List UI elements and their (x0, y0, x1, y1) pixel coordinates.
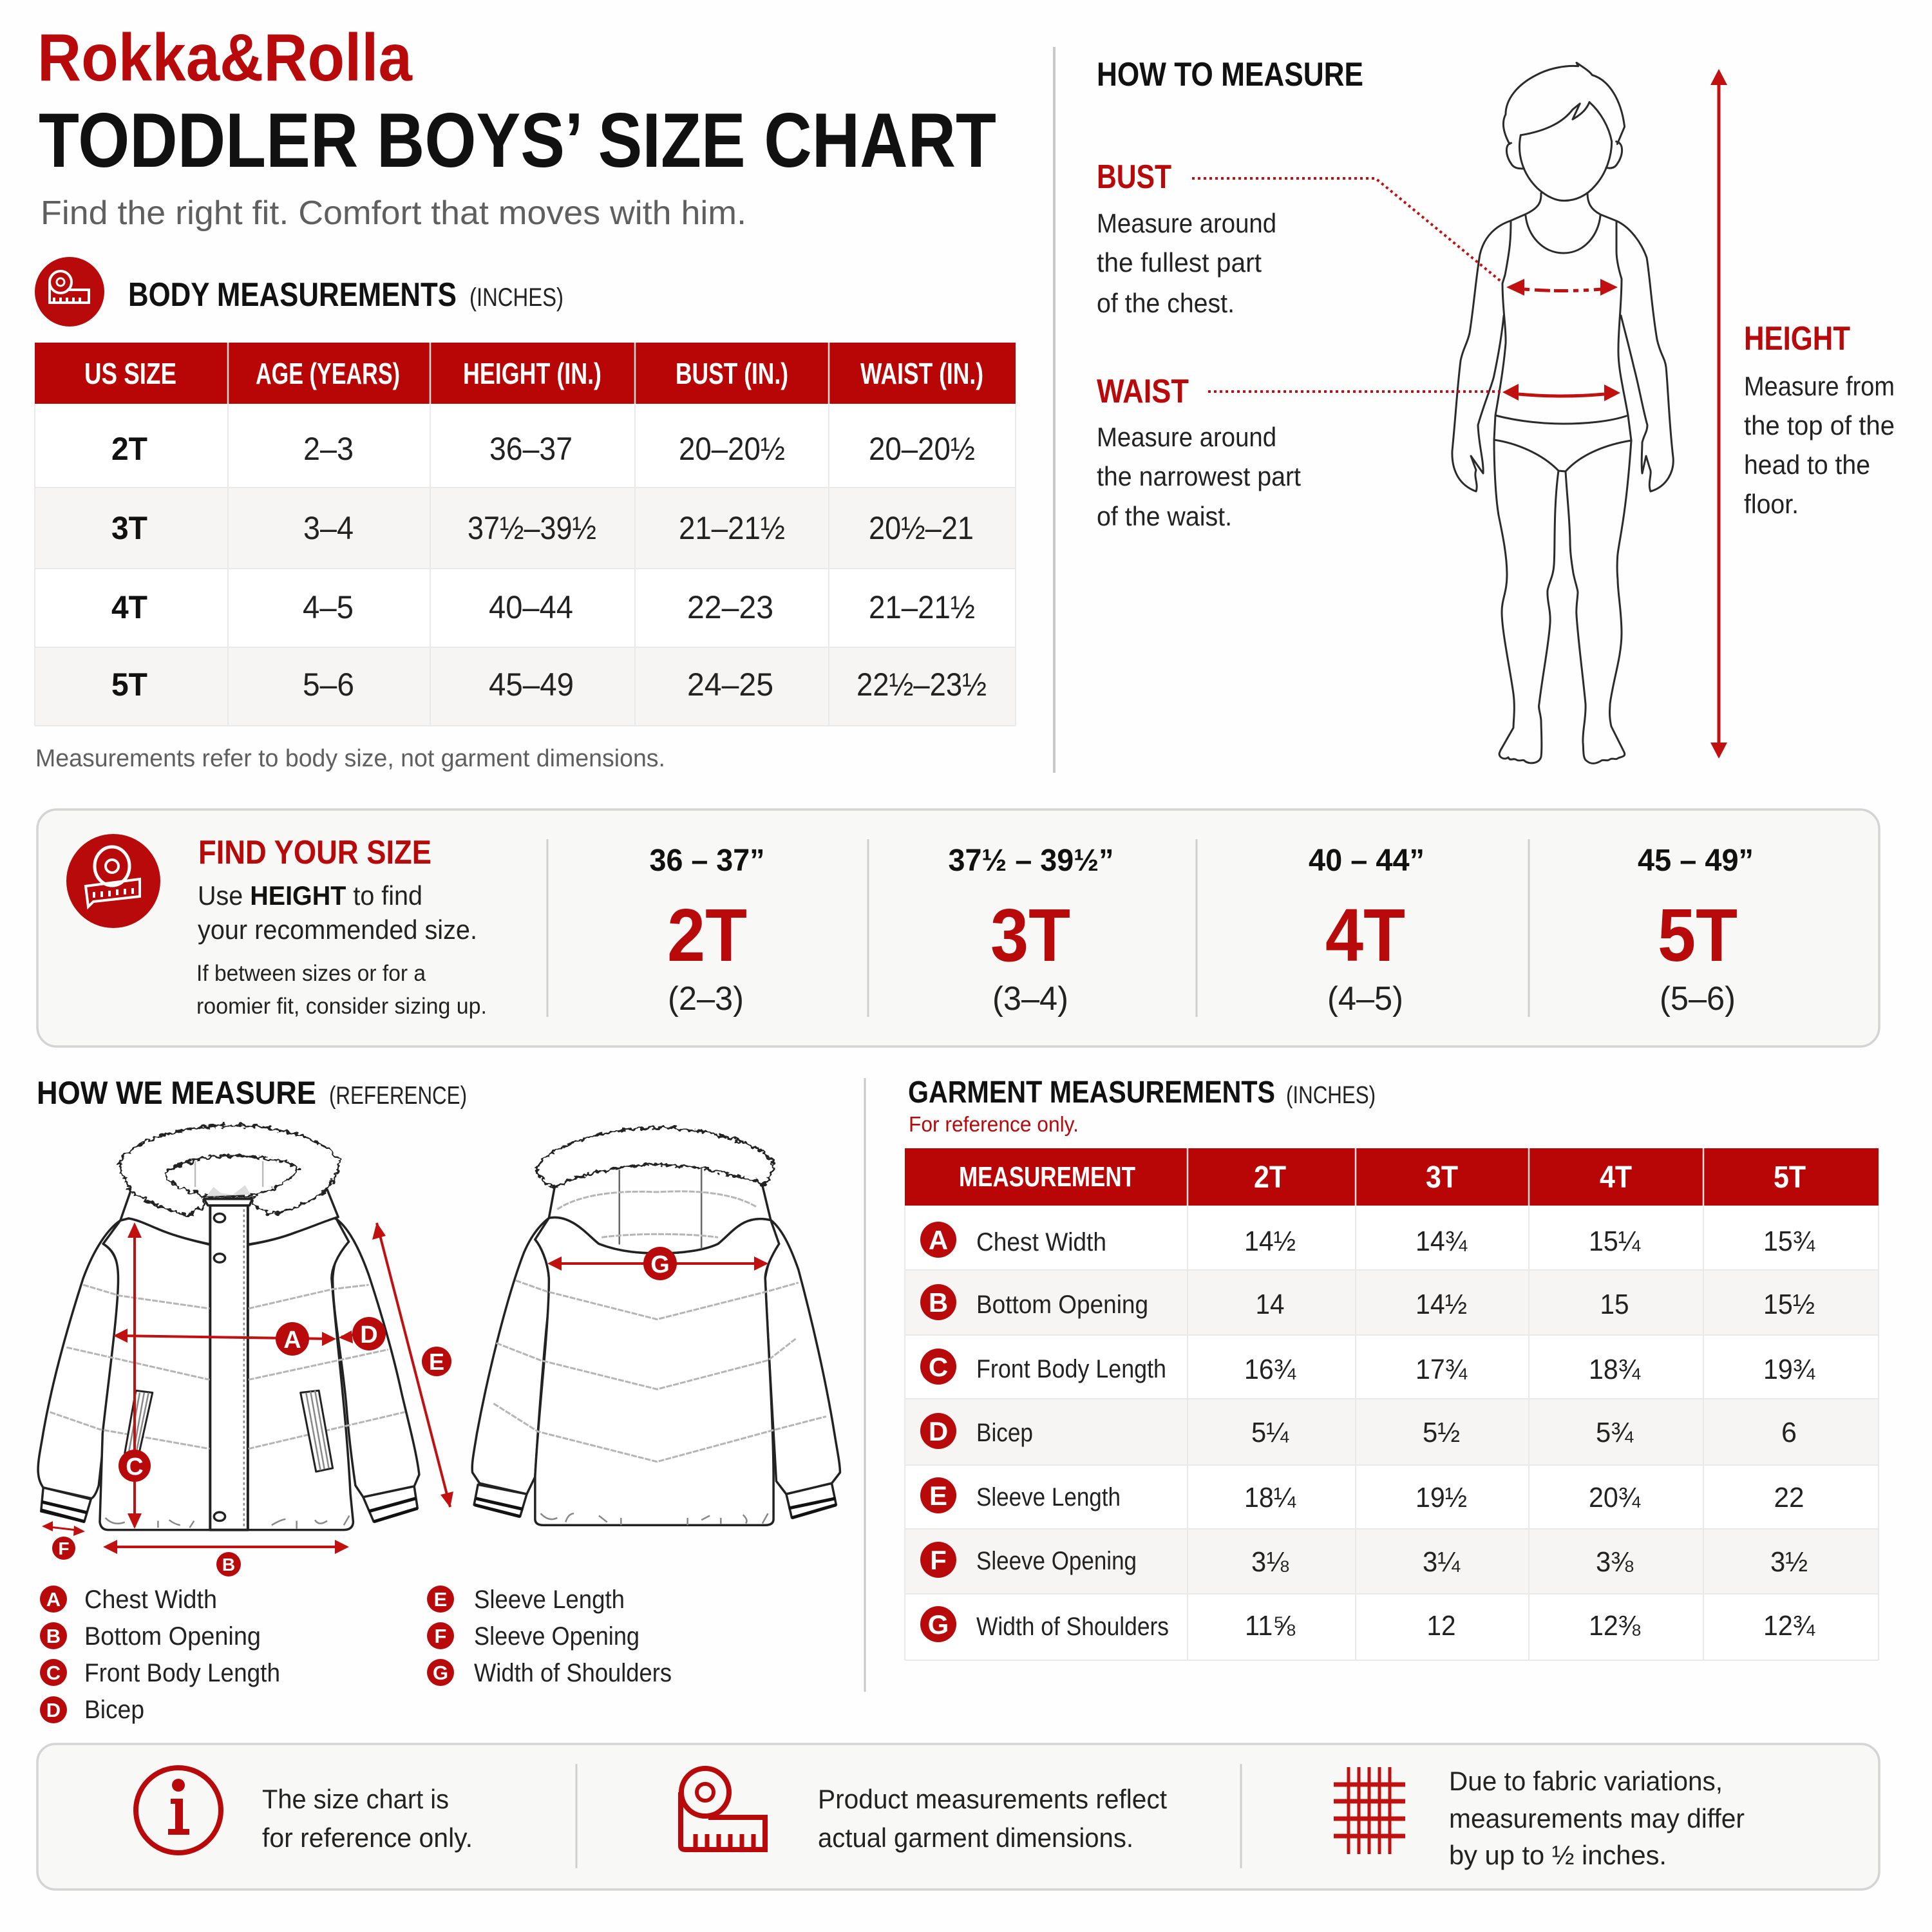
legend: measurement keys (40, 1586, 672, 1724)
size column: 4T: 40 – 44” (1309, 844, 1425, 878)
instructions text: roomier fit, consider sizing up. (196, 994, 487, 1019)
note: product measurements (818, 1784, 1167, 1853)
badge: A (276, 1322, 309, 1356)
figure: child outline (1452, 62, 1673, 764)
panel: footer notes (37, 1744, 1879, 1889)
table row: sleeve opening: 3⅜ (1596, 1546, 1633, 1578)
note: fabric variation (1449, 1766, 1745, 1870)
table row: 2T: 20–20½ (679, 431, 785, 467)
note: product measurements: actual garment dimensions. (818, 1823, 1133, 1853)
table row: width of shoulders: G (928, 1609, 949, 1640)
table row: sleeve opening: F (930, 1545, 947, 1575)
table row: 2T: 36–37 (489, 431, 573, 467)
bust explanation (1097, 158, 1276, 318)
legend item B: Bottom Opening (84, 1622, 261, 1651)
table row: 5T: 22½–23½ (857, 667, 987, 703)
legend item C: Front Body Length (84, 1659, 280, 1687)
size column: 3T: (3–4) (992, 980, 1068, 1018)
table row: sleeve length: E (929, 1481, 947, 1511)
table row: sleeve length: Sleeve Length (976, 1483, 1121, 1511)
instructions text: If between sizes or for a (196, 961, 426, 986)
table row: bottom opening (920, 1284, 1815, 1320)
height explanation (1744, 320, 1895, 519)
table header row: HEIGHT (IN.) (463, 357, 601, 390)
arrow: B bottom opening (103, 1540, 349, 1554)
arrow: D bicep (339, 1331, 355, 1343)
table row: 4T: 40–44 (489, 589, 573, 625)
table row: front body length (920, 1349, 1815, 1385)
table row: front body length: 19¾ (1763, 1354, 1815, 1385)
icon: measuring tape badge (35, 257, 104, 327)
reference note: For reference only. (909, 1112, 1079, 1136)
legend item G: Width of Shoulders (474, 1659, 672, 1687)
instructions text: FIND YOUR SIZE (198, 834, 431, 871)
table row: 3T (111, 510, 974, 546)
table row: 3T: 3–4 (303, 510, 354, 546)
size column: 2T: (2–3) (668, 980, 744, 1018)
size column: 5T (1638, 844, 1754, 1018)
table row: chest width: 14½ (1244, 1226, 1296, 1257)
table row: sleeve opening (920, 1542, 1808, 1578)
arrow: height (1710, 69, 1727, 759)
table row: bottom opening: Bottom Opening (976, 1291, 1148, 1319)
badge: F (52, 1537, 75, 1560)
legend item A: A (46, 1588, 61, 1611)
size column: 5T: 45 – 49” (1638, 844, 1754, 878)
table row: sleeve length: 20¾ (1589, 1482, 1641, 1513)
waist explanation (1097, 373, 1301, 531)
arrow: bust measure (1506, 279, 1618, 296)
table row: 3T: 20½–21 (869, 510, 974, 546)
legend item G: G (433, 1662, 448, 1684)
size column: 2T (649, 844, 765, 1018)
legend item D (40, 1696, 144, 1724)
table row: bottom opening: 15½ (1763, 1289, 1815, 1320)
instructions text: Use HEIGHT to find (198, 880, 422, 911)
size column: 2T: 2T (667, 893, 747, 977)
waist explanation: the narrowest part (1097, 461, 1301, 491)
height explanation: Measure from (1744, 371, 1895, 401)
table header row: WAIST (IN.) (860, 357, 983, 390)
table row: sleeve length: 22 (1774, 1482, 1804, 1513)
badge: G: G (650, 1251, 670, 1278)
table row: front body length: Front Body Length (976, 1355, 1166, 1383)
brand name: Rokka&Rolla (37, 21, 413, 95)
table row: sleeve opening: Sleeve Opening (976, 1547, 1137, 1575)
arrow: A chest width (113, 1329, 336, 1346)
table row: chest width: A (929, 1225, 948, 1255)
table row: 4T: 22–23 (687, 589, 773, 625)
measurement arrows on jackets (42, 1222, 768, 1577)
panel: how to measure (1097, 56, 1895, 764)
arrow: F sleeve opening (42, 1521, 85, 1536)
table row: 5T: 5–6 (303, 667, 354, 703)
badge: B: B (222, 1555, 235, 1575)
table header row: BUST (IN.) (676, 357, 788, 390)
size column: 2T: 36 – 37” (649, 844, 765, 878)
height explanation: HEIGHT (1744, 320, 1850, 357)
table row: sleeve opening: 3⅛ (1251, 1546, 1289, 1578)
leader: waist dotted line (1208, 390, 1501, 393)
table header row (959, 1160, 1806, 1195)
table row: bottom opening: 14 (1256, 1289, 1284, 1320)
table row: 5T: 5T (111, 667, 147, 703)
table row: bicep: 5¼ (1251, 1417, 1289, 1448)
size column: 3T (948, 844, 1114, 1018)
badge: D: D (360, 1321, 378, 1349)
table row: sleeve opening: 3½ (1770, 1546, 1808, 1578)
table: body measurements (35, 343, 1016, 726)
panel: body measurements (35, 257, 1016, 772)
subtitle: Find the right fit. Comfort that moves with him. (41, 194, 746, 232)
legend item E: Sleeve Length (474, 1586, 625, 1614)
badge: B (216, 1552, 241, 1577)
table row: 2T: 20–20½ (869, 431, 975, 467)
table row: 2T: 2–3 (303, 431, 354, 467)
table row: sleeve opening: 3¼ (1423, 1546, 1461, 1578)
icon: measuring tape (66, 834, 160, 928)
table row: bottom opening: 14½ (1416, 1289, 1467, 1320)
heading unit: (INCHES) (1286, 1082, 1376, 1109)
note: fabric variation: by up to ½ inches. (1449, 1840, 1667, 1870)
table row: 5T: 24–25 (687, 667, 773, 703)
legend item A: Chest Width (84, 1586, 217, 1614)
note: product measurements: Product measurements reflect (818, 1784, 1167, 1814)
heading: garment measurements: GARMENT MEASUREMENTS (908, 1075, 1275, 1110)
legend item C: C (46, 1662, 61, 1684)
table row: 3T: 3T (111, 510, 147, 546)
table row: width of shoulders: Width of Shoulders (976, 1613, 1169, 1641)
table row: chest width: 15¼ (1589, 1226, 1641, 1257)
height explanation: head to the (1744, 450, 1870, 480)
table row: 4T: 4T (111, 589, 147, 625)
badge: E: E (429, 1349, 444, 1375)
size column: 4T (1309, 844, 1425, 1018)
main title: TODDLER BOYS’ SIZE CHART (39, 97, 996, 184)
height explanation: the top of the (1744, 410, 1895, 440)
waist explanation: WAIST (1097, 373, 1189, 410)
table header row: MEASUREMENT (959, 1161, 1135, 1193)
badge: E (422, 1347, 451, 1376)
table row: width of shoulders (920, 1606, 1815, 1642)
legend item B: B (46, 1625, 61, 1647)
size column: 5T: 5T (1658, 893, 1738, 977)
note: reference only: The size chart is (262, 1784, 449, 1814)
note: fabric variation: measurements may differ (1449, 1803, 1745, 1833)
table header row: AGE (YEARS) (256, 357, 400, 390)
table row: front body length: 18¾ (1589, 1354, 1641, 1385)
table row: 4T: 21–21½ (869, 589, 975, 625)
table row: bicep: 5½ (1423, 1417, 1460, 1448)
table row: width of shoulders: 12⅜ (1589, 1610, 1640, 1642)
bust explanation: the fullest part (1097, 247, 1262, 278)
size column: 4T: 4T (1325, 893, 1405, 977)
badge: F: F (58, 1539, 70, 1558)
arrow: G width of shoulders (547, 1256, 768, 1271)
panel: how we measure (37, 1075, 840, 1724)
badge: A: A (283, 1327, 301, 1354)
heading: body measurements: BODY MEASUREMENTS (128, 276, 457, 314)
heading: how we measure: HOW WE MEASURE (37, 1075, 316, 1111)
arrow: waist measure (1502, 384, 1620, 401)
table row: 5T: 45–49 (489, 667, 574, 703)
heading: how to measure: HOW TO MEASURE (1097, 56, 1363, 93)
table row: bottom opening: 15 (1600, 1289, 1629, 1320)
table header row: 3T (1426, 1160, 1458, 1195)
note: reference only: for reference only. (262, 1823, 473, 1853)
badge: D (352, 1317, 386, 1350)
note: fabric variation: Due to fabric variations, (1449, 1766, 1723, 1796)
table row: bottom opening: B (929, 1287, 948, 1318)
table header row: 5T (1774, 1160, 1806, 1195)
bust explanation: BUST (1097, 158, 1171, 196)
table row: 2T: 2T (111, 431, 147, 467)
legend item D: D (46, 1699, 61, 1721)
table row: chest width: Chest Width (976, 1228, 1106, 1256)
table row: 3T: 37½–39½ (468, 510, 596, 546)
table row: chest width (920, 1222, 1815, 1258)
diagram: jacket front (38, 1125, 419, 1530)
panel: garment measurements (905, 1075, 1879, 1660)
table row: 2T (111, 431, 975, 467)
table row: 4T: 4–5 (303, 589, 354, 625)
arrow: E sleeve length (372, 1222, 453, 1508)
leader: bust dotted line (1192, 178, 1502, 282)
table header row: 4T (1600, 1160, 1632, 1195)
table row: width of shoulders: 11⅝ (1245, 1610, 1295, 1642)
heading qualifier: (REFERENCE) (329, 1082, 467, 1110)
legend item E: E (434, 1588, 447, 1611)
header: brand and title (37, 21, 996, 232)
heading unit: (INCHES) (469, 283, 564, 312)
waist explanation: Measure around (1097, 422, 1276, 452)
legend item F: F (435, 1625, 446, 1647)
table row: bicep: 5¾ (1596, 1417, 1634, 1448)
size column: 5T: (5–6) (1660, 980, 1736, 1018)
table footnote: Measurements refer to body size, not garment dimensions. (35, 745, 665, 772)
table row: 4T (111, 589, 975, 625)
height explanation: floor. (1744, 489, 1799, 519)
arrow: C front body length (128, 1222, 142, 1529)
table header row: 2T (1254, 1160, 1286, 1195)
table header row (84, 357, 983, 390)
icon: fabric grid (1334, 1767, 1405, 1854)
table row: sleeve length (920, 1477, 1804, 1513)
table row: 5T (111, 667, 987, 703)
badge: C (118, 1450, 151, 1482)
diagram: jacket back (472, 1127, 840, 1525)
bust explanation: Measure around (1097, 208, 1276, 238)
icon: measuring tape (681, 1768, 765, 1850)
size column: 3T: 37½ – 39½” (948, 844, 1114, 878)
table: garment measurements (905, 1148, 1879, 1660)
legend item D: Bicep (84, 1696, 144, 1724)
table row: chest width: 14¾ (1416, 1226, 1468, 1257)
table row: front body length: C (929, 1352, 948, 1382)
table row: sleeve length: 18¼ (1244, 1482, 1296, 1513)
badge: G (643, 1247, 677, 1280)
instructions text (196, 834, 487, 1019)
table row: chest width: 15¾ (1763, 1226, 1815, 1257)
table row: width of shoulders: 12¾ (1763, 1610, 1815, 1642)
table row: front body length: 16¾ (1244, 1354, 1296, 1385)
icon: info (136, 1768, 221, 1853)
note: reference only (262, 1784, 473, 1853)
table header row: US SIZE (84, 357, 176, 390)
size column: 4T: (4–5) (1327, 980, 1403, 1018)
badge: C: C (126, 1454, 144, 1481)
table row: 3T: 21–21½ (679, 510, 785, 546)
table row: bicep: 6 (1781, 1417, 1797, 1448)
size column: 3T: 3T (990, 893, 1070, 977)
legend item F: Sleeve Opening (474, 1622, 639, 1651)
table row: front body length: 17¾ (1416, 1354, 1468, 1385)
table row: bicep: D (929, 1416, 948, 1446)
table row: sleeve length: 19½ (1416, 1482, 1467, 1513)
instructions text: your recommended size. (198, 914, 477, 945)
table row: bicep: Bicep (976, 1419, 1033, 1447)
table row: bicep (920, 1413, 1797, 1449)
table row: width of shoulders: 12 (1427, 1610, 1455, 1642)
panel: find your size (37, 810, 1879, 1046)
bust explanation: of the chest. (1097, 288, 1235, 318)
waist explanation: of the waist. (1097, 501, 1232, 531)
